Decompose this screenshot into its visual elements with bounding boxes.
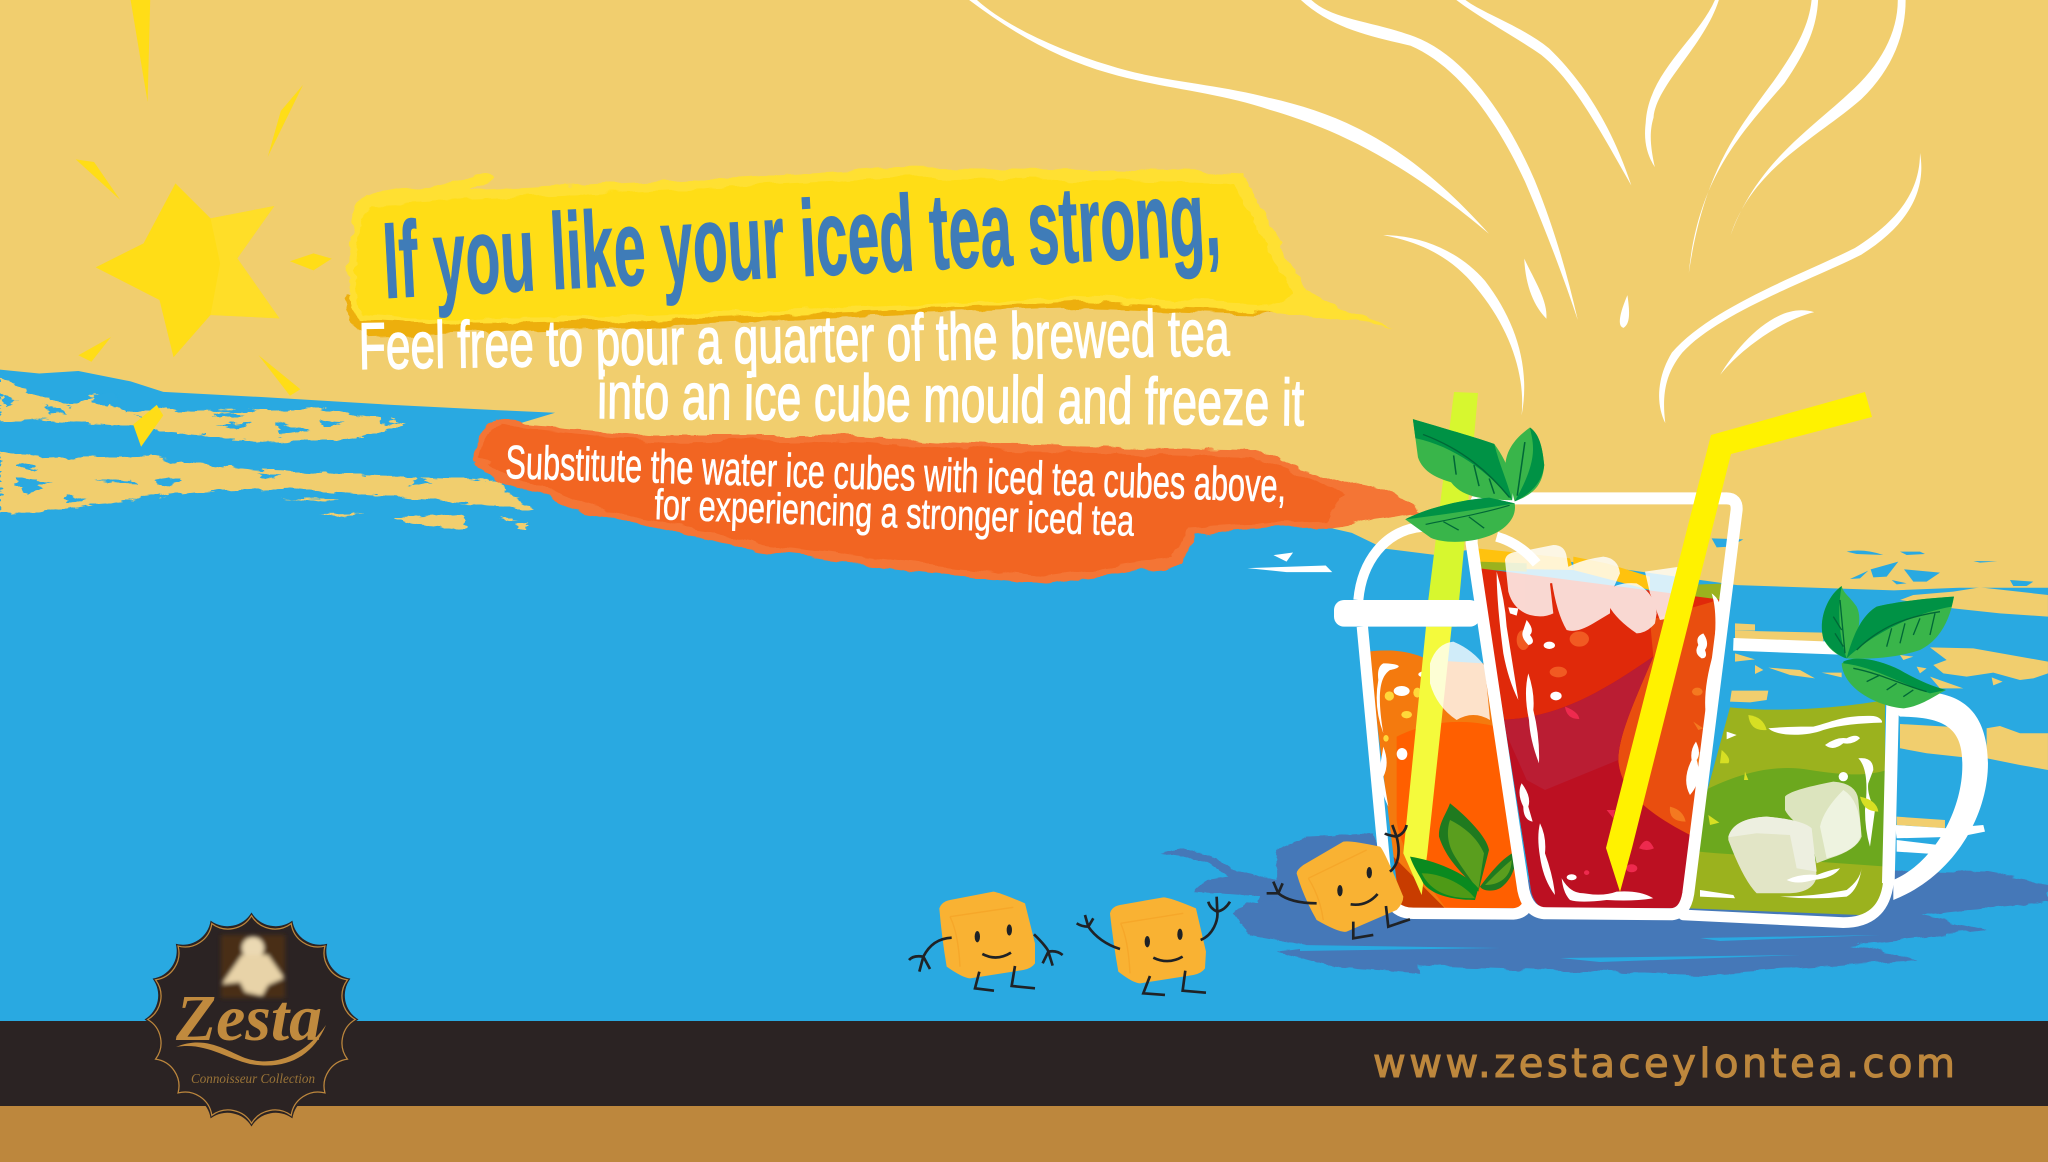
tall glass spots and highlights [1517, 630, 1710, 822]
right sand brush strokes [1712, 538, 2048, 828]
left straw [1403, 392, 1478, 895]
sub-heading line 2: into an ice cube mould and freeze it [597, 358, 1305, 439]
callout text line 2: for experiencing a stronger iced tea [654, 481, 1135, 546]
callout: orange brush [473, 421, 1421, 585]
tea-glass shadow on ground [1160, 833, 2048, 975]
cup highlights [1377, 663, 1438, 807]
cube character three [1267, 825, 1410, 938]
logo wordmark: Zesta [175, 982, 322, 1055]
small white brush marks [1247, 552, 1332, 572]
lid bar [1334, 600, 1480, 627]
mug mint leaves [1822, 586, 1954, 708]
logo tagline: Connoisseur Collection [191, 1072, 315, 1087]
logo emblem [221, 935, 285, 998]
footer tan band [0, 1106, 2048, 1162]
footer dark band [0, 1021, 2048, 1106]
cup liquid [1370, 650, 1522, 908]
logo swoosh [176, 1025, 326, 1065]
tall glass outline [1472, 498, 1737, 914]
website url: www.zestaceylontea.com [1373, 1041, 1955, 1087]
right straw [1606, 392, 1872, 892]
cube character two [1077, 897, 1230, 995]
characters: three tea ice cubes [909, 825, 1410, 995]
illustration: lidded cup and tall glass [1334, 392, 1737, 914]
logo badge [144, 912, 358, 1126]
mug ice cubes [1728, 782, 1862, 893]
background paint layers [0, 370, 2048, 1021]
heading: If you like your iced tea strong, [380, 156, 1223, 321]
mint leaves in cup [1410, 803, 1516, 900]
sub-heading line 1: Feel free to pour a quarter of the brewed tea [358, 295, 1230, 383]
illustration: mug of green iced tea [1680, 586, 1988, 923]
left sand brush strokes [0, 378, 536, 529]
tall glass liquid [1477, 548, 1573, 570]
mug outline [1733, 644, 1893, 883]
icon: star with rays [76, 0, 332, 447]
tall glass ice cubes [1505, 545, 1688, 633]
cup dome outline [1358, 527, 1537, 600]
mug bubbles and highlights [1700, 716, 1882, 898]
cup walls [1362, 627, 1529, 914]
mint leaves on glass [1405, 419, 1544, 542]
cube character one [909, 892, 1063, 991]
banner: yellow headline brush [346, 167, 1396, 336]
ice cubes in cup [1430, 642, 1490, 720]
steam swirls [969, 0, 1921, 423]
mug handle [1890, 693, 1988, 900]
callout text line 1: Substitute the water ice cubes with iced tea cubes above, [505, 435, 1287, 512]
